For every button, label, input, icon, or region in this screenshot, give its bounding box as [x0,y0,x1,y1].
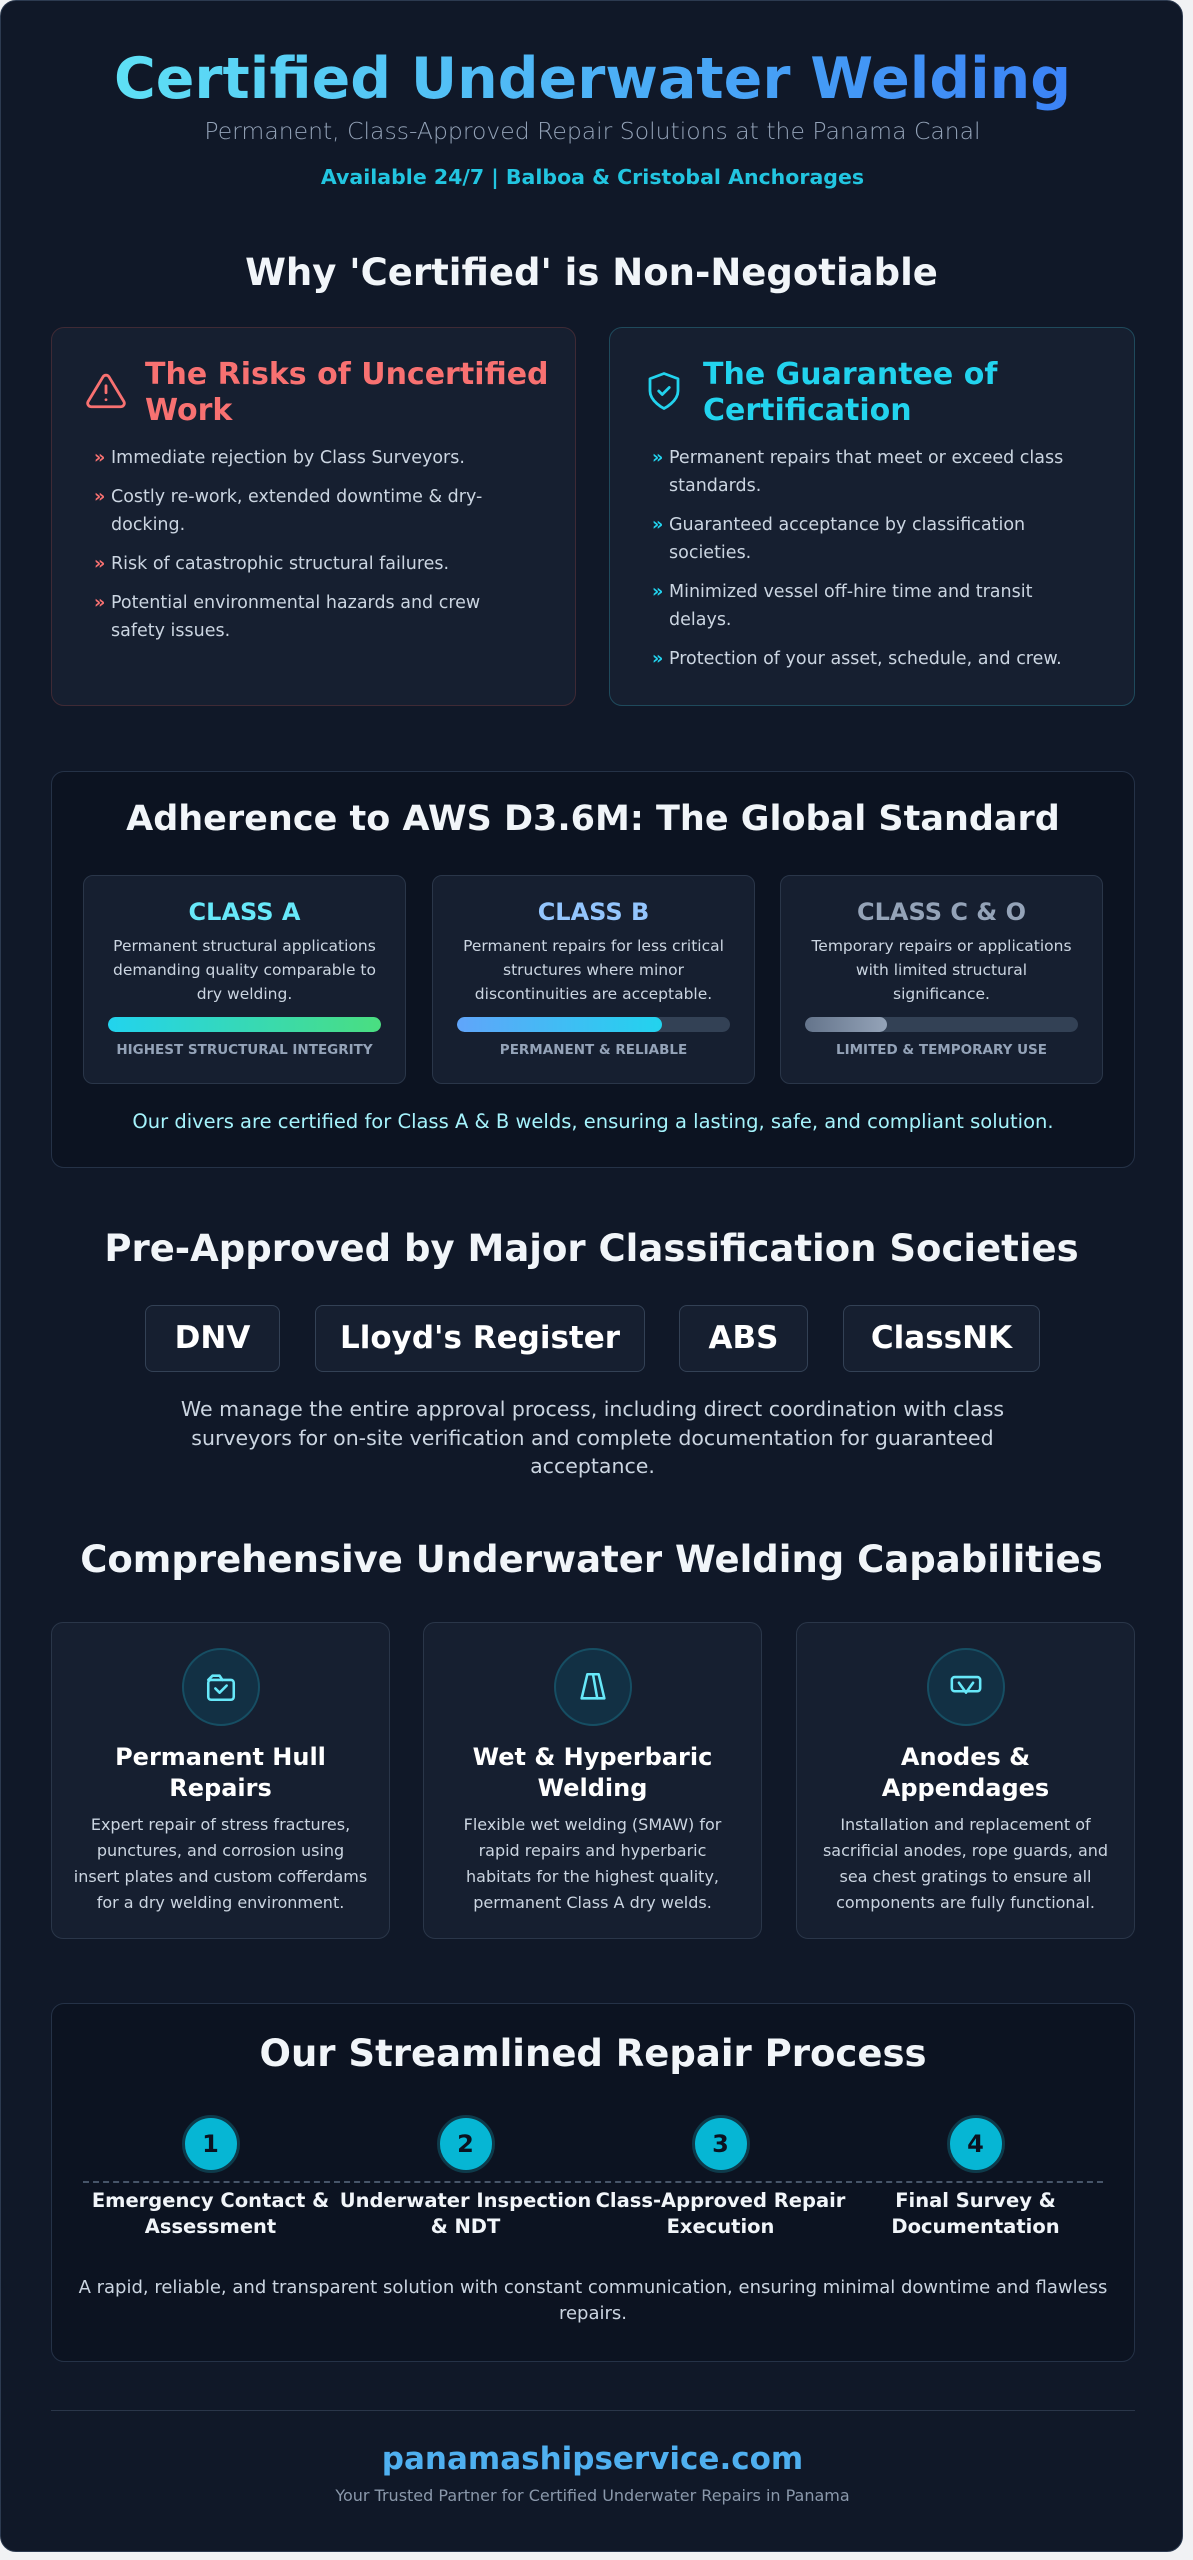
card: hull repairs: Permanent Hull Repairs [115,1743,326,1802]
step 4 [891,2115,1060,2238]
text: process summary: A rapid, reliable, and transparent solution with constant communication, ensuring minimal downtime and flawless repairs. [79,2277,1107,2324]
heading: why certified: Why 'Certified' is Non-Negotiable [245,251,938,294]
card: class A: HIGHEST STRUCTURAL INTEGRITY [116,1042,373,1058]
icon: shield [648,372,680,410]
card: class A: CLASS A [189,898,300,926]
step 2: Underwater Inspection & NDT [340,2189,591,2238]
card: anodes [796,1622,1135,1939]
list: » [652,448,663,468]
badge: DNV [145,1305,280,1372]
subtitle: Permanent, Class-Approved Repair Solutions at the Panama Canal [204,117,981,145]
list: Permanent repairs that meet or exceed class standards. [669,448,1063,496]
badge: ABS: ABS [709,1320,778,1356]
badge: ABS [679,1305,808,1372]
heading: Adherence to AWS D3.6M: The Global Standard [126,799,1060,839]
badge: ClassNK [843,1305,1040,1372]
card: anodes: Installation and replacement of sacrificial anodes, rope guards, and sea chest gratings to ensure all components are fully functional. [823,1815,1108,1912]
panel: repair process [51,2003,1135,2362]
icon [182,1648,260,1726]
footer url: panamashipservice.com [382,2441,803,2477]
list: Guaranteed acceptance by classification societies. [669,515,1025,563]
card: class B: PERMANENT & RELIABLE [500,1042,687,1058]
card: anodes: Anodes & Appendages [882,1743,1049,1802]
list: Costly re-work, extended downtime & dry-docking. [111,487,482,535]
card: class A [83,875,406,1084]
panel heading: The Risks of Uncertified Work [145,357,549,428]
card: class C & O: LIMITED & TEMPORARY USE [836,1042,1047,1058]
tagline: Available 24/7 | Balboa & Cristobal Anchorages [321,165,864,189]
card: class C & O [780,875,1103,1084]
step 1: 1 [202,2130,219,2158]
list: Risk of catastrophic structural failures. [111,554,449,574]
icon [554,1648,632,1726]
icon [926,1648,1004,1726]
panel: guarantee [609,327,1135,706]
icon: warning [86,374,126,408]
step 2: 2 [457,2130,474,2158]
step 4: 4 [967,2130,984,2158]
step 1 [92,2115,329,2238]
list: » [94,593,105,613]
list: » [94,487,105,507]
card: class B [432,875,755,1084]
list: » [94,448,105,468]
card: hull repairs: insert plates and custom cofferdams [74,1867,367,1886]
badge: Lloyd's: Lloyd's Register [340,1320,620,1356]
list: » [652,515,663,535]
card: class B: Permanent repairs for less critical structures where minor discontinuities are acceptable. [463,937,724,1003]
note: Our divers are certified for Class A & B welds, ensuring a lasting, safe, and compliant solution. [132,1110,1054,1133]
card: hull repairs [51,1622,390,1939]
step 4: Final Survey & Documentation [891,2189,1060,2238]
list: » [652,582,663,602]
list [94,448,482,641]
footer tagline: Your Trusted Partner for Certified Underwater Repairs in Panama [335,2486,850,2505]
badge: DNV: DNV [175,1320,250,1356]
panel: risks [51,327,576,706]
card: hull repairs: for a dry welding environment. [97,1893,344,1912]
badge: ClassNK: ClassNK [871,1320,1012,1356]
list: » [652,649,663,669]
step 1: Emergency Contact & Assessment [92,2189,329,2238]
heading: classification societies: Pre-Approved by Major Classification Societies [104,1227,1079,1270]
card: wet welding: Wet & Hyperbaric Welding [473,1743,712,1802]
card: class C & O: Temporary repairs or applications with limited structural significance. [811,937,1072,1003]
list: Potential environmental hazards and crew safety issues. [111,593,480,641]
step 3: 3 [712,2130,729,2158]
list: Protection of your asset, schedule, and crew. [669,649,1062,669]
step 2 [340,2115,591,2238]
card: hull repairs: Expert repair of stress fractures, [91,1815,350,1834]
step 3 [596,2115,846,2238]
card: wet welding [423,1622,762,1939]
list [652,448,1063,669]
card: wet welding: Flexible wet welding (SMAW) for rapid repairs and hyperbaric habitats for the highest quality, permanent Class A dry welds. [464,1815,721,1912]
list: » [94,554,105,574]
card: hull repairs: punctures, and corrosion using [97,1841,344,1860]
list: Minimized vessel off-hire time and transit delays. [669,582,1032,630]
badge: Lloyd's [315,1305,645,1372]
heading: capabilities: Comprehensive Underwater Welding Capabilities [80,1538,1103,1581]
panel heading: The Guarantee of Certification [703,357,997,428]
card: class C & O: CLASS C & O [857,898,1026,926]
step 3: Class-Approved Repair Execution [596,2189,845,2238]
heading: Our Streamlined Repair Process [260,2032,926,2075]
card: class A: Permanent structural applications demanding quality comparable to dry welding. [113,937,376,1003]
text: approval process: We manage the entire approval process, including direct coordination with class surveyors for on-site verification and complete documentation for guaranteed acceptance. [181,1397,1004,1478]
list: Immediate rejection by Class Surveyors. [111,448,465,468]
title: Certified Underwater Welding [114,46,1071,112]
card: class B: CLASS B [538,898,649,926]
panel: AWS standard [51,771,1135,1168]
